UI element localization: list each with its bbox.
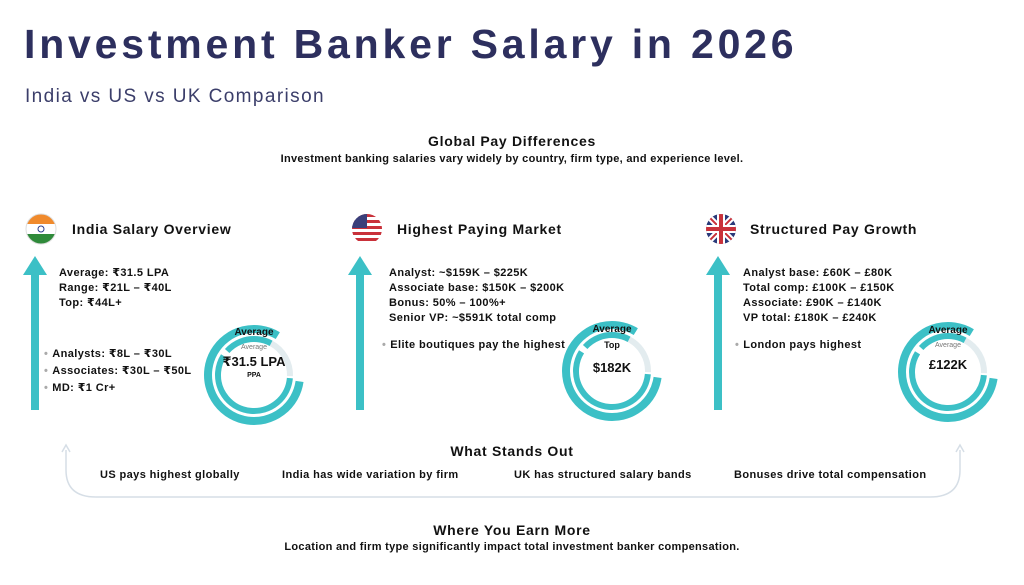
ring: US <box>560 319 664 423</box>
section heading: global pay: Global Pay Differences <box>428 133 596 149</box>
title: Investment Banker Salary in 2026 <box>24 21 797 67</box>
ring labels: Average <box>592 324 632 335</box>
subtitle: India vs US vs UK Comparison <box>25 86 325 107</box>
bullets <box>44 348 192 394</box>
bullets: • Elite boutiques pay the highest <box>382 339 565 351</box>
stats: Associate base: $150K – $200K <box>389 282 564 294</box>
ring: UK <box>896 320 1000 424</box>
ring labels: Average <box>234 327 274 338</box>
ring labels: PPA <box>247 372 261 379</box>
ring labels: ₹31.5 LPA <box>222 354 286 369</box>
panel: US <box>382 221 632 375</box>
heading: What Stands Out <box>450 443 574 459</box>
bullets: • Analysts: ₹8L – ₹30L <box>44 348 172 360</box>
item 1: US pays highest globally <box>100 469 240 481</box>
ring labels <box>928 325 968 372</box>
stats: Analyst base: £60K – £80K <box>743 267 892 279</box>
stats: VP total: £180K – £240K <box>743 312 877 324</box>
stats: Range: ₹21L – ₹40L <box>59 282 172 294</box>
ring labels: Average <box>241 344 267 351</box>
arrow: UK <box>706 256 730 410</box>
heading: Structured Pay Growth <box>750 221 917 237</box>
stats: Senior VP: ~$591K total comp <box>389 312 556 324</box>
graphics <box>23 214 998 498</box>
stats: Associate: £90K – £140K <box>743 297 882 309</box>
bullets: • MD: ₹1 Cr+ <box>44 382 116 394</box>
stats <box>389 267 564 324</box>
arrow: US <box>348 256 372 410</box>
stats: Average: ₹31.5 LPA <box>59 267 169 279</box>
ring labels <box>592 324 632 375</box>
stats: Bonus: 50% – 100%+ <box>389 297 506 309</box>
section: what stands out <box>100 443 927 481</box>
bullets: • London pays highest <box>735 339 861 351</box>
arrow: India <box>23 256 47 410</box>
icon: US flag <box>352 214 382 244</box>
ring labels: £122K <box>929 357 967 372</box>
section: where you earn more: Location and firm type significantly impact total investment banker compensation. <box>284 541 740 553</box>
item 2: India has wide variation by firm <box>282 469 459 481</box>
stats <box>59 267 172 309</box>
connector: bottom curve <box>62 445 964 497</box>
ring labels <box>222 327 286 379</box>
section: where you earn more: Where You Earn More <box>433 522 591 538</box>
bullets: • Associates: ₹30L – ₹50L <box>44 365 192 377</box>
heading: India Salary Overview <box>72 221 231 237</box>
panel: UK <box>735 221 968 372</box>
stats: Analyst: ~$159K – $225K <box>389 267 528 279</box>
stats: Top: ₹44L+ <box>59 297 122 309</box>
item 3: UK has structured salary bands <box>514 469 692 481</box>
section heading: global pay <box>281 133 743 165</box>
stats: Total comp: £100K – £150K <box>743 282 895 294</box>
icon: UK flag <box>706 214 736 244</box>
ring labels: Average <box>935 342 961 349</box>
ring labels: $182K <box>593 360 631 375</box>
icon: India flag <box>26 214 56 244</box>
section heading: global pay: Investment banking salaries vary widely by country, firm type, and experience level. <box>281 153 743 165</box>
item 4: Bonuses drive total compensation <box>734 469 927 481</box>
ring: India <box>202 323 306 427</box>
stats <box>743 267 895 324</box>
ring labels: Average <box>928 325 968 336</box>
panel: India <box>44 221 286 394</box>
heading: Highest Paying Market <box>397 221 562 237</box>
section: where you earn more <box>284 522 740 553</box>
ring labels: Top <box>604 340 620 350</box>
